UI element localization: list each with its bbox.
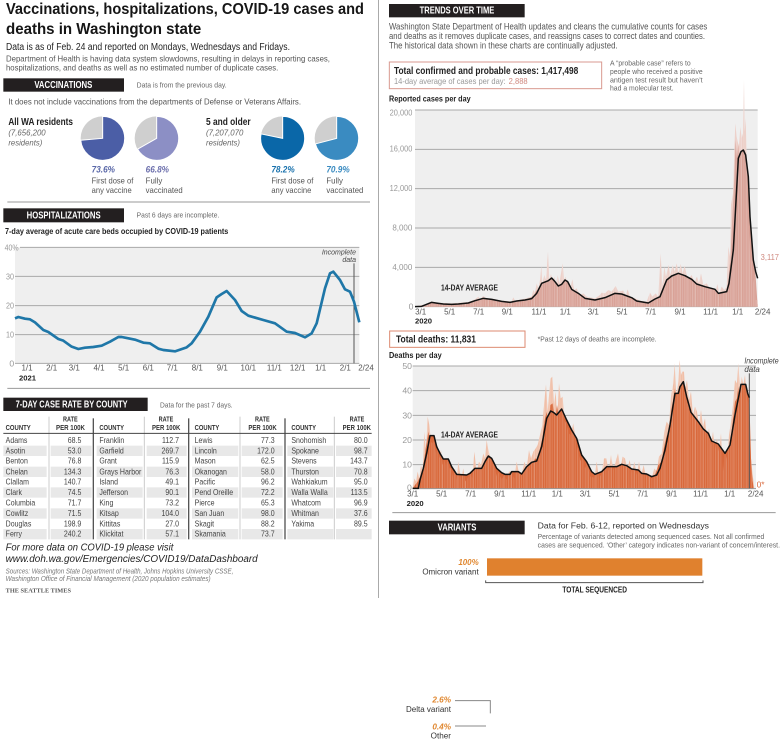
heading: vaccinations: VACCINATIONS xyxy=(34,80,93,91)
table: county rates: RATE xyxy=(159,415,173,424)
label: 78.2% first dose: 78.2% xyxy=(271,165,295,175)
line chart: hospital beds: 12/1 xyxy=(290,364,306,373)
line chart: hospital beds: 0 xyxy=(9,358,14,368)
label: 66.8% fully vaccinated: vaccinated xyxy=(146,185,183,195)
chart: reported cases per day: 3/1 xyxy=(415,307,427,316)
bracket: total sequenced: TOTAL SEQUENCED xyxy=(562,585,627,594)
label: 70.9% fully vaccinated xyxy=(326,165,363,195)
chart: reported cases per day: 1/1 xyxy=(732,307,744,316)
trends description: Washington State Department of Health updates and cleans the cumulative counts for cases xyxy=(389,22,708,32)
label: Delta variant 2.6% xyxy=(406,694,490,714)
label: Omicron variant 100%: 100% xyxy=(458,557,479,567)
callout: more data link xyxy=(6,543,258,565)
chart title: 7-day average of acute care beds occupied by COVID-19 patients xyxy=(5,226,228,236)
chart title: deaths: Deaths per day xyxy=(389,350,442,360)
label: 14-day average: 14-DAY AVERAGE xyxy=(441,283,498,293)
chart: reported cases per day: 7/1 xyxy=(645,307,657,316)
chart: reported cases per day: 7/1 xyxy=(473,307,485,316)
table: county rates: 96.9 xyxy=(354,498,368,507)
chart: deaths per day: 9/1 xyxy=(494,490,506,499)
label: Delta variant 2.6%: Delta variant xyxy=(406,705,452,714)
table: county rates: Jefferson xyxy=(99,487,128,497)
line chart: hospital beds: 6/1 xyxy=(143,364,154,373)
intro note: Department of Health is having data system slowdowns, resulting in delays in reporting cases, xyxy=(6,53,330,63)
panel: case rate by county xyxy=(3,398,372,594)
table: county rates: COUNTY xyxy=(195,423,219,432)
table: county rates: 240.2 xyxy=(64,529,81,539)
group label: all WA residents: residents) xyxy=(8,138,42,148)
line chart: hospital beds: 10 xyxy=(6,330,14,340)
table: county rates: Clallam xyxy=(6,477,29,487)
table: county rates: Thurston xyxy=(291,467,319,476)
label: 66.8% fully vaccinated: Fully xyxy=(146,176,163,186)
callout: total deaths: Total deaths: 11,831 xyxy=(396,334,476,345)
table: county rates: Asotin xyxy=(6,446,25,455)
label: 78.2% first dose: First dose of xyxy=(271,176,314,186)
callout: total cases: Total confirmed and probable cases: 1,417,498 xyxy=(394,66,579,77)
label: 70.9% fully vaccinated: Fully xyxy=(326,176,344,186)
table: county rates: Grant xyxy=(99,456,118,466)
heading: trends over time xyxy=(389,4,525,17)
table: county rates: PER 100K xyxy=(56,423,85,432)
note: probable case: antigen test result but haven’t xyxy=(610,75,703,84)
chart: reported cases per day: 5/1 xyxy=(616,307,628,316)
variants description: Percentage of variants detected among sequenced cases. Not all confirmed xyxy=(538,534,764,541)
group label: all WA residents xyxy=(8,117,73,148)
table: county rates: Spokane xyxy=(291,446,319,455)
table: county rates: PER 100K xyxy=(248,423,277,432)
table: county rates: Okanogan xyxy=(195,467,227,476)
chart: deaths per day: 3/1 xyxy=(580,490,591,499)
table: county rates: PER 100K xyxy=(343,423,371,432)
label: 73.6% first dose: First dose of xyxy=(92,176,134,186)
table: county rates: Pacific xyxy=(195,477,215,487)
chart: reported cases per day: 3/1 xyxy=(588,307,599,316)
chart: deaths per day: 5/1 xyxy=(436,490,448,499)
table: county rates: Pend Oreille xyxy=(195,487,233,497)
chart: reported cases per day: 5/1 xyxy=(444,307,456,316)
callout: total cases xyxy=(389,62,602,89)
line: 14-day average of deaths xyxy=(413,382,749,488)
line chart: hospital beds: 2/1 xyxy=(340,364,351,373)
chart: reported cases per day: 12,000 xyxy=(390,183,412,193)
chart: reported cases per day: 11/1 xyxy=(703,307,719,316)
table: county rates: 88.2 xyxy=(261,519,275,528)
table: county rates: 76.8 xyxy=(68,456,81,466)
table: county rates: 72.2 xyxy=(261,487,275,497)
table: county rates: Garfield xyxy=(99,446,124,455)
line chart: hospital beds: 30 xyxy=(6,271,14,281)
table: county rates: 53.0 xyxy=(68,446,81,455)
line chart: hospital beds: 8/1 xyxy=(192,364,203,373)
pie: all residents fully vaccinated 66.8% xyxy=(135,116,179,160)
table: county rates: Lincoln xyxy=(195,446,217,455)
panel: trends over time xyxy=(389,4,708,103)
table: county rates: Grays Harbor xyxy=(99,467,142,476)
group label: all WA residents: All WA residents xyxy=(8,117,73,128)
label: 70.9% fully vaccinated: 70.9% xyxy=(326,165,350,175)
chart: deaths per day: 1/1 xyxy=(724,490,736,499)
table: county rates: 68.5 xyxy=(68,435,81,445)
table: county rates: 143.7 xyxy=(350,456,368,466)
label: 70.9% fully vaccinated: vaccinated xyxy=(326,185,363,195)
table: county rates: 104.0 xyxy=(161,508,179,518)
table: county rates: 115.9 xyxy=(162,456,179,466)
table: county rates: 58.0 xyxy=(261,467,275,476)
note: probable case: had a molecular test. xyxy=(610,84,674,93)
table: county rates: 112.7 xyxy=(162,435,179,445)
bars: daily deaths xyxy=(413,358,756,488)
label: 73.6% first dose xyxy=(92,165,134,195)
vaccination date note: Data is from the previous day. xyxy=(137,80,227,89)
trends description: and deaths as it removes duplicate cases, and reassigns cases to correct dates and counties. xyxy=(389,31,705,41)
heading: trends over time: TRENDS OVER TIME xyxy=(420,6,495,17)
callout: total deaths xyxy=(390,331,525,347)
chart: deaths per day: 2020 xyxy=(407,499,424,508)
table: county rates: 95.0 xyxy=(354,477,368,487)
line: 14-day average of cases xyxy=(415,150,758,307)
heading: 7-day case rate: 7-DAY CASE RATE BY COUNTY xyxy=(16,400,128,411)
chart: reported cases per day: 9/1 xyxy=(674,307,686,316)
table: county rates: Skamania xyxy=(195,529,226,539)
table: county rates: Whitman xyxy=(291,508,319,518)
line chart: hospital beds: 40% xyxy=(5,242,19,252)
table: county rates: COUNTY xyxy=(99,423,124,432)
table: county rates: Adams xyxy=(6,435,28,445)
chart: reported cases per day: 9/1 xyxy=(502,307,513,316)
group label: 5 and older xyxy=(206,117,251,148)
table: county rates: Whatcom xyxy=(291,498,321,507)
chart: reported cases per day: 20,000 xyxy=(390,107,412,117)
line chart: hospital beds xyxy=(5,242,374,383)
sources: Washington Office of Financial Management (2020 population estimates) xyxy=(6,576,211,583)
table: county rates: 76.3 xyxy=(165,467,179,476)
table: county rates: Kitsap xyxy=(99,508,119,518)
table: county rates: Yakima xyxy=(291,519,315,528)
label: 14-day average: 14-DAY AVERAGE xyxy=(441,429,498,439)
group label: 5 and older: 5 and older xyxy=(206,117,251,128)
line chart: hospital beds: 2021 xyxy=(19,374,37,383)
label: Other 0.4% xyxy=(431,721,486,741)
table: county rates: Pierce xyxy=(195,498,214,507)
table: county rates: COUNTY xyxy=(291,423,316,432)
chart: deaths per day: 30 xyxy=(402,410,412,420)
table: county rates: 89.5 xyxy=(354,519,368,528)
table: county rates: Mason xyxy=(195,456,216,466)
line chart: hospital beds: 2/1 xyxy=(46,364,58,373)
callout: total cases: 14-day average of cases per day: xyxy=(394,76,506,86)
table: county rates: RATE xyxy=(255,415,270,424)
table: county rates: 113.5 xyxy=(351,487,368,497)
line chart: hospital beds: 11/1 xyxy=(267,364,282,373)
callout: more data link: www.doh.wa.gov/Emergencies/COVID19/DataDashboard xyxy=(6,554,258,565)
chart: reported cases per day: 11/1 xyxy=(532,307,547,316)
line chart: hospital beds: data xyxy=(342,257,356,264)
panel: deaths xyxy=(389,331,779,508)
heading: hospitalizations: HOSPITALIZATIONS xyxy=(27,210,101,221)
chart: reported cases per day: 1/1 xyxy=(560,307,571,316)
table: county rates: 70.8 xyxy=(354,467,368,476)
table: county rates: 77.3 xyxy=(261,435,275,445)
label: 73.6% first dose: any vaccine xyxy=(92,185,132,195)
table: county rates: Klickitat xyxy=(99,529,124,539)
table: county rates: Clark xyxy=(6,487,22,497)
sources: Sources: Washington State Department of Health, Johns Hopkins University CSSE, xyxy=(6,569,233,576)
table: county rates: RATE xyxy=(63,415,78,424)
table: county rates: 62.5 xyxy=(261,456,275,466)
note: probable case: people who received a positive xyxy=(610,67,703,76)
table: county rates: 90.1 xyxy=(165,487,179,497)
table: county rates: 74.5 xyxy=(68,487,81,497)
variants description: cases are sequenced. ‘Other’ category indicates non-variant of concern/interest. xyxy=(538,542,780,549)
table: county rates: 73.2 xyxy=(165,498,179,507)
heading: variants: VARIANTS xyxy=(438,523,477,534)
table: county rates: Island xyxy=(99,477,118,487)
chart: reported cases per day: 16,000 xyxy=(390,144,412,154)
intro note: hospitalizations, and deaths as well as no estimated number of duplicate cases. xyxy=(6,63,278,73)
chart: deaths per day: 1/1 xyxy=(552,490,563,499)
table: county rates: COUNTY xyxy=(6,423,31,432)
label: 78.2% first dose: any vaccine xyxy=(271,185,311,195)
group label: 5 and older: residents) xyxy=(206,138,240,148)
group label: 5 and older: (7,207,070 xyxy=(206,128,243,138)
table: county rates: King xyxy=(99,498,113,507)
pie: 5 and older first dose 78.2% xyxy=(261,116,305,160)
table: county rates: PER 100K xyxy=(152,423,181,432)
table: county rates: 198.9 xyxy=(64,519,81,528)
label: 73.6% first dose: 73.6% xyxy=(92,165,115,175)
label: Other 0.4%: Other xyxy=(431,732,451,741)
line chart: hospital beds: 5/1 xyxy=(118,364,130,373)
line chart: hospital beds: 2/24 xyxy=(358,364,374,373)
table: county rates: Chelan xyxy=(6,467,28,476)
sources xyxy=(6,569,233,583)
heading: variants xyxy=(389,521,525,534)
county note: Data for the past 7 days. xyxy=(160,400,233,409)
trends description: The historical data shown in these charts are continually adjusted. xyxy=(389,41,618,51)
label: Other 0.4%: 0.4% xyxy=(432,721,452,731)
table: county rates: 134.3 xyxy=(64,467,81,476)
title: Vaccinations, hospitalizations, COVID-19 cases and xyxy=(6,1,364,18)
line chart: hospital beds: 3/1 xyxy=(69,364,80,373)
chart: reported cases per day: 0 xyxy=(409,301,414,311)
variants date: Data for Feb. 6-12, reported on Wednesdays xyxy=(538,520,710,530)
table: county rates: Snohomish xyxy=(291,435,326,445)
chart: deaths per day: 10 xyxy=(402,460,412,470)
label: latest deaths 0*: 0* xyxy=(757,480,765,490)
chart: deaths per day: 11/1 xyxy=(521,490,537,499)
label: 78.2% first dose xyxy=(271,165,314,195)
table: county rates: 27.0 xyxy=(165,519,179,528)
bar: Omicron xyxy=(487,558,702,576)
chart: deaths per day: 7/1 xyxy=(465,490,477,499)
table: county rates: 73.7 xyxy=(261,529,275,539)
callout: more data link: For more data on COVID-19 please visit xyxy=(6,543,174,554)
panel: left intro and vaccinations xyxy=(3,1,370,202)
chart: reported cases per day: 2020 xyxy=(415,316,432,325)
table: county rates: 140.7 xyxy=(64,477,81,487)
table: county rates: Kittitas xyxy=(99,519,120,528)
chart: reported cases per day: 2/24 xyxy=(755,307,771,316)
line chart: hospital beds: 4/1 xyxy=(93,364,105,373)
table: county rates: 49.1 xyxy=(165,477,179,487)
chart title: cases: Reported cases per day xyxy=(389,93,471,103)
table: county rates: Benton xyxy=(6,456,28,466)
chart: deaths per day: 40 xyxy=(402,386,412,396)
chart: reported cases per day xyxy=(390,80,779,325)
group label: all WA residents: (7,656,200 xyxy=(8,128,46,138)
table: county rates: RATE xyxy=(350,415,364,424)
table: county rates: Ferry xyxy=(6,529,22,539)
line chart: hospital beds: 20 xyxy=(6,301,14,311)
chart: deaths per day: 50 xyxy=(402,361,412,371)
label: incomplete data xyxy=(744,357,779,374)
table: county rates: 37.6 xyxy=(354,508,368,518)
table: county rates: Columbia xyxy=(6,498,36,507)
chart: deaths per day: 0 xyxy=(407,482,412,492)
variants description xyxy=(538,534,780,549)
table: county rates: Skagit xyxy=(195,519,215,528)
label: 66.8% fully vaccinated xyxy=(146,165,183,195)
table: county rates: Cowlitz xyxy=(6,508,28,518)
table: county rates: 71.5 xyxy=(68,508,81,518)
vaccination scope note: It does not include vaccinations from the departments of Defense or Veterans Affairs. xyxy=(8,96,301,106)
table: county rates: 98.0 xyxy=(261,508,275,518)
table: county rates: Douglas xyxy=(6,519,31,528)
table: county rates: Walla Walla xyxy=(291,487,328,497)
line chart: hospital beds: 1/1 xyxy=(21,364,33,373)
panel: hospitalizations xyxy=(3,208,374,388)
chart: deaths per day: 3/1 xyxy=(407,490,419,499)
table: county rates: Franklin xyxy=(99,435,124,445)
table: county rates: 96.2 xyxy=(261,477,275,487)
table: county rates: 172.0 xyxy=(257,446,275,455)
table: county rates: Stevens xyxy=(291,456,317,466)
table: county rates: Wahkiakum xyxy=(291,477,328,487)
line chart: hospital beds: Incomplete xyxy=(322,250,356,257)
line chart: hospital beds: 9/1 xyxy=(217,364,228,373)
bars: daily cases xyxy=(415,80,758,307)
trends description xyxy=(389,22,708,51)
note: probable case xyxy=(610,59,703,93)
chart: deaths per day: 5/1 xyxy=(608,490,620,499)
note: probable case: A “probable case” refers to xyxy=(610,59,691,68)
chart: deaths per day xyxy=(402,357,779,508)
label: 66.8% fully vaccinated: 66.8% xyxy=(146,165,169,175)
heading: vaccinations xyxy=(3,78,124,92)
table: county rates: 80.0 xyxy=(354,435,368,445)
table: county rates: Lewis xyxy=(195,435,213,445)
hospitalization note: Past 6 days are incomplete. xyxy=(137,210,219,219)
table: county rates: 71.7 xyxy=(68,498,81,507)
line chart: hospital beds: 7/1 xyxy=(167,364,178,373)
chart: deaths per day: 11/1 xyxy=(693,490,709,499)
chart: deaths per day: 20 xyxy=(402,435,412,445)
callout: total cases: 2,888 xyxy=(509,76,528,86)
label: Delta variant 2.6%: 2.6% xyxy=(431,694,452,704)
table: county rates: 98.7 xyxy=(354,446,368,455)
label: Omicron variant 100% xyxy=(422,557,479,577)
subtitle: Data is as of Feb. 24 and reported on Mondays, Wednesdays and Fridays. xyxy=(6,42,290,53)
heading: hospitalizations xyxy=(3,208,124,222)
line chart: hospital beds: 10/1 xyxy=(241,364,257,373)
chart: reported cases per day: 4,000 xyxy=(392,262,412,272)
chart: deaths per day: 9/1 xyxy=(666,490,678,499)
table: county rates: 269.7 xyxy=(161,446,179,455)
title: deaths in Washington state xyxy=(6,21,201,38)
chart: reported cases per day: 8,000 xyxy=(392,223,412,233)
chart: deaths per day: 2/24 xyxy=(748,490,764,499)
label: Omicron variant 100%: Omicron variant xyxy=(422,567,479,577)
pie: 5 and older fully vaccinated 70.9% xyxy=(315,116,359,160)
title xyxy=(6,1,364,38)
table: county rates: 65.3 xyxy=(261,498,275,507)
label: incomplete data: data xyxy=(744,365,760,374)
credit: The Seattle Times: THE SEATTLE TIMES xyxy=(6,587,71,594)
pie: all residents first dose 73.6% xyxy=(81,116,125,160)
note: deaths incomplete: *Past 12 days of deaths are incomplete. xyxy=(538,334,657,343)
table: county rates: San Juan xyxy=(195,508,224,518)
line chart: hospital beds: 1/1 xyxy=(315,364,327,373)
chart: deaths per day: 7/1 xyxy=(637,490,649,499)
intro note xyxy=(6,53,330,73)
table: county rates: 57.1 xyxy=(165,529,179,539)
table: county rates xyxy=(3,415,372,539)
panel: variants xyxy=(389,513,780,741)
